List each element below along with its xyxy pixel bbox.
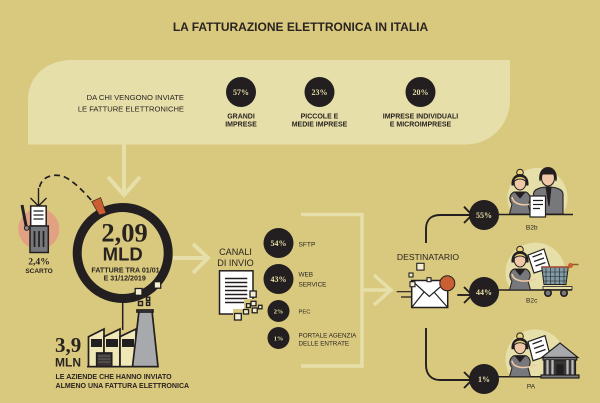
channel: portale agenzia: 1% [274, 335, 283, 342]
small squares [135, 282, 161, 295]
channel: PEC: 2% [274, 308, 283, 315]
arrow: bracket to recipient [301, 214, 391, 366]
channel: PEC: PEC [298, 310, 310, 316]
woman [510, 169, 530, 214]
channel: web service: WEB [298, 272, 313, 278]
text: who sends: DA CHI VENGONO INVIATE [87, 93, 184, 102]
stat: piccole e medie imprese: PICCOLE E [301, 114, 339, 120]
sheet [530, 196, 546, 217]
recipient: B2c: 44% [476, 288, 492, 297]
icon: envelope [397, 263, 455, 308]
sheet [528, 249, 550, 273]
stat: piccole e medie imprese [292, 77, 348, 128]
shopping cart [542, 263, 578, 296]
ring: total invoices: MLD [103, 244, 143, 265]
channel: SFTP: 54% [270, 239, 286, 248]
icon: document [220, 271, 262, 320]
recipient: B2b: B2b [526, 224, 538, 232]
stat: scarto: SCARTO [25, 268, 53, 275]
icon: printer discard [18, 188, 59, 252]
stat: grandi imprese: GRANDI [227, 114, 255, 120]
recipient: B2b [469, 168, 573, 232]
channel: SFTP [264, 228, 316, 258]
connector arrows to recipients [426, 207, 472, 388]
channel: web service [264, 264, 326, 294]
man [534, 168, 563, 214]
stat: piccole e medie imprese: 23% [312, 88, 328, 97]
smoke squares [138, 297, 150, 306]
ring: total invoices: 2,09 [101, 218, 148, 248]
arrow: invoices to channels [173, 244, 208, 273]
sheet [528, 336, 550, 361]
arrow: panel to invoices [108, 144, 140, 195]
stat: scarto [25, 256, 53, 275]
ring: total invoices: E 31/12/2019 [104, 274, 146, 282]
stat: imprese individuali: 20% [412, 88, 428, 97]
stat: scarto: 2,4% [28, 256, 50, 268]
panel: who sends the invoices [28, 60, 510, 144]
stat: imprese individuali [383, 77, 458, 128]
stat: companies count: 3,9 [55, 333, 81, 357]
woman [510, 246, 536, 290]
ring: total invoices [77, 198, 168, 298]
title: LA FATTURAZIONE ELETTRONICA IN ITALIA [173, 20, 428, 34]
woman [510, 333, 536, 377]
stat: companies count: MLN [55, 356, 81, 370]
channel: web service: SERVICE [298, 282, 326, 288]
text: who sends: LE FATTURE ELETTRONICHE [78, 104, 184, 113]
channel: PEC [268, 300, 310, 322]
icon: factory [87, 297, 158, 367]
stat: companies count: LE AZIENDE CHE HANNO INVIATO [56, 374, 172, 381]
recipient: PA [469, 329, 579, 394]
stat: companies count [55, 333, 189, 390]
ring: total invoices: FATTURE TRA 01/01 [91, 266, 160, 274]
stat: grandi imprese: IMPRESE [225, 121, 257, 128]
heading: destinatario: DESTINATARIO [397, 252, 459, 262]
heading: canali di invio: CANALI [219, 247, 252, 257]
stat: grandi imprese: 57% [233, 88, 249, 97]
recipient: B2b: 55% [476, 211, 492, 220]
stat: imprese individuali: IMPRESE INDIVIDUALI [383, 114, 458, 120]
stat: piccole e medie imprese: MEDIE IMPRESE [292, 121, 348, 128]
recipient: B2c: B2c [526, 298, 538, 304]
stat: companies count: ALMENO UNA FATTURA ELETTRONICA [56, 383, 189, 390]
recipient: B2c [469, 243, 578, 307]
channel: portale agenzia: PORTALE AGENZIA [298, 332, 357, 340]
channel: portale agenzia: DELLE ENTRATE [298, 341, 349, 348]
arrow: dashed discard path [40, 175, 92, 201]
channel: SFTP: SFTP [298, 242, 316, 248]
bank building [541, 343, 579, 378]
red marker [92, 198, 106, 215]
channel: portale agenzia [268, 327, 357, 349]
recipient: PA: 1% [478, 375, 490, 384]
channel: web service: 43% [270, 275, 286, 284]
stat: imprese individuali: E MICROIMPRESE [390, 121, 452, 128]
stat: grandi imprese [225, 77, 257, 128]
heading: canali di invio: DI INVIO [217, 258, 254, 268]
recipient: PA: PA [527, 384, 536, 390]
